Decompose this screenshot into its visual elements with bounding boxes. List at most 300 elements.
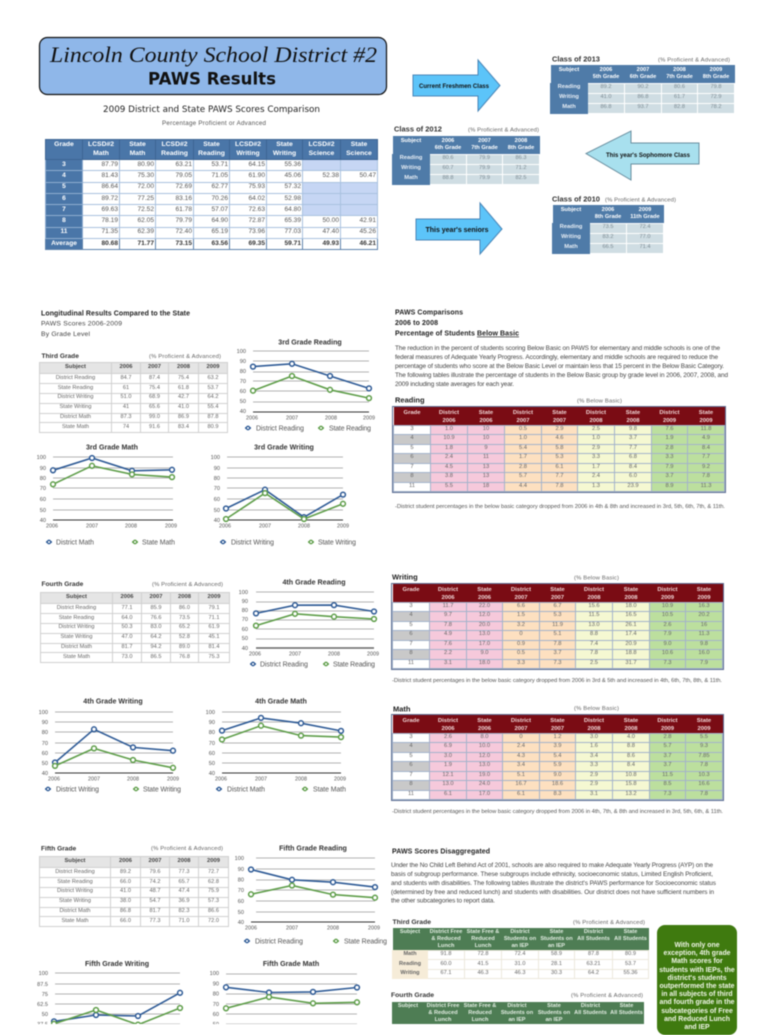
line chart: 3rd grade writing: 2007 (259, 524, 271, 530)
table: writing below basic: 16.3 (698, 603, 710, 609)
table: third grade scores: 83.4 (178, 424, 189, 430)
callout: subgroup performance summary: outperformed the state (659, 983, 735, 990)
table: math below basic: 8.0 (480, 734, 489, 740)
table: fourth grade scores (40, 592, 230, 664)
table: fifth grade scores: 2008 (178, 858, 190, 864)
table: writing below basic: 7.3 (663, 660, 672, 666)
heading: comparison title: 2009 District and State PAWS Scores Comparison (103, 104, 320, 114)
heading: fifth grade: (% Proficient & Advanced) (151, 846, 223, 852)
table: third grade scores: 2008 (177, 364, 190, 370)
callout: subgroup performance summary: exception, 4th grade (663, 950, 730, 957)
table: math below basic: 2009 (661, 726, 674, 732)
table: class of 2012 scores: 71.2 (516, 165, 526, 171)
table: fourth grade subgroup scores (391, 1002, 645, 1034)
panel: below basic introduction: percentage of students who score at the Below Basic Level or maintain less that 15 percent in the Below Basic Category. (395, 363, 724, 370)
table: math below basic: 10.8 (625, 772, 637, 778)
table: fourth grade scores: 71.1 (209, 615, 219, 621)
table: writing below basic: 17.4 (625, 631, 637, 637)
table: writing below basic: 2007 (551, 594, 564, 600)
line chart: 3rd grade reading (236, 338, 376, 433)
table: reading below basic: 8 (410, 473, 414, 479)
table: math below basic: 12.0 (479, 753, 490, 759)
table: third grade scores: 61.8 (178, 385, 189, 391)
line chart: 3rd grade writing: 2009 (337, 524, 349, 530)
table: fourth grade subgroup scores: State Free & (464, 1003, 496, 1009)
table: writing below basic: 10.9 (662, 603, 673, 609)
line chart: 3rd grade writing: 50 (214, 508, 220, 514)
table: math below basic: 2.6 (444, 734, 452, 740)
heading: class of 2010: Class of 2010 (552, 194, 600, 204)
table: fourth grade scores: 2009 (208, 594, 220, 600)
heading: class of 2012 (394, 124, 540, 134)
line chart: fifth grade reading (232, 843, 390, 946)
table: fourth grade scores: 52.8 (179, 634, 190, 640)
line chart: fifth grade reading: 40 (238, 920, 244, 926)
line chart: 4th grade writing: 40 (42, 771, 48, 777)
table: district and state scores: State (129, 141, 146, 148)
table: third grade subgroup scores: 30.3 (551, 970, 562, 976)
line chart: 4th grade math: 2009 (334, 776, 346, 782)
table: district and state scores: Writing (236, 150, 260, 156)
panel: below basic introduction: 2009 including state averages for each year. (395, 381, 514, 388)
table: writing below basic: 3.2 (517, 622, 525, 628)
table: reading below basic: 1.8 (445, 445, 453, 451)
table: fifth grade scores: 82.3 (179, 908, 189, 914)
table: fourth grade scores: 86.0 (179, 605, 190, 611)
table: math below basic: 8.6 (627, 753, 635, 759)
table: math below basic: 6 (409, 762, 413, 768)
table: fifth grade scores: 77.3 (179, 869, 189, 875)
table: class of 2013 scores: 86.8 (638, 94, 648, 100)
table: class of 2010 scores: 8th Grade (595, 214, 621, 220)
line chart: fifth grade reading: 50 (238, 910, 244, 916)
table: math below basic: 2007 (551, 726, 564, 732)
arrow: current freshmen class (412, 58, 502, 113)
table: class of 2012 scores: Writing (401, 165, 421, 171)
table: writing below basic: 11.7 (443, 603, 453, 609)
heading: fifth grade (39, 843, 228, 856)
table: class of 2010 scores: Subject (561, 206, 581, 212)
table: math below basic: 10.0 (479, 743, 490, 749)
table: third grade subgroup scores: 31.0 (515, 960, 525, 966)
table: class of 2012 scores: 60.7 (443, 165, 453, 171)
table: third grade subgroup scores: Writing (400, 970, 420, 976)
table: reading below basic: 7.6 (665, 426, 674, 432)
table: reading below basic: 13 (483, 473, 489, 479)
table: writing below basic: 3 (409, 603, 413, 609)
table: reading below basic: 8.4 (629, 464, 637, 470)
table: fifth grade scores: 57.3 (208, 898, 219, 904)
table: reading below basic: 2.5 (592, 426, 600, 432)
heading: math: Math (393, 704, 411, 714)
table: writing below basic: 5.1 (553, 631, 562, 637)
line chart: 4th grade reading: 2008 (328, 652, 340, 658)
table: third grade scores: District Math (60, 414, 91, 420)
table: reading below basic: 7 (410, 464, 414, 470)
line chart: 3rd grade reading: 80 (240, 369, 246, 375)
panel: disaggregated scores introduction: Under the No Child Left Behind Act of 2001, schools are also required to make Adequate Yearly Progress (AYP) on the (391, 862, 713, 869)
line chart: 4th grade math: 80 (209, 730, 215, 736)
line chart: 4th grade writing: 2009 (167, 776, 179, 782)
table: district and state scores: 72.63 (248, 206, 265, 213)
table: class of 2012 scores: 79.9 (479, 165, 490, 171)
table: writing below basic: 18.0 (625, 603, 637, 609)
line chart: 4th grade math: 100 (206, 710, 215, 716)
table: math below basic: 8.5 (663, 781, 672, 787)
table: math below basic: 10.3 (698, 772, 710, 778)
table: reading below basic: State (699, 410, 713, 416)
table: third grade subgroup scores: District (510, 929, 530, 935)
table: class of 2010 scores: 72.4 (640, 224, 650, 230)
table: math below basic: 3.7 (663, 753, 672, 759)
table: class of 2013 scores: 7th Grade (666, 74, 693, 80)
table: district and state scores: 87.79 (101, 161, 118, 168)
heading: fourth grade: (% Proficient & Advanced) (152, 582, 223, 588)
table: class of 2012 scores: Reading (400, 155, 422, 161)
table: fourth grade subgroup scores: Reduced (468, 1010, 492, 1016)
table: reading below basic: 2.4 (592, 473, 600, 479)
table: reading below basic: 2008 (626, 418, 640, 424)
line chart: 4th grade math: 60 (209, 751, 215, 757)
table: class of 2010 scores (551, 204, 665, 255)
table: writing below basic: 1.5 (517, 612, 525, 618)
table: third grade subgroup scores: Reading (399, 960, 421, 966)
heading: writing (391, 572, 620, 582)
table: reading below basic: 4.5 (445, 464, 453, 470)
line chart: 4th grade reading: 2009 (367, 652, 379, 658)
table: writing below basic: 20.2 (698, 612, 710, 618)
heading: class of 2013: Class of 2013 (552, 54, 600, 64)
table: third grade scores: 61 (123, 385, 129, 391)
table: class of 2013 scores: 72.9 (711, 94, 721, 100)
table: district and state scores: 69.35 (248, 240, 265, 247)
table: math below basic: 11 (408, 791, 414, 797)
table: class of 2013 scores: 80.6 (674, 84, 685, 90)
table: math below basic: 1.2 (553, 734, 562, 740)
table: fifth grade scores: 2006 (119, 858, 132, 864)
table: class of 2013 scores: Writing (559, 94, 579, 100)
table: reading below basic: 2006 (442, 418, 456, 424)
table: third grade scores: 80.9 (208, 424, 218, 430)
table: fourth grade scores: 73.0 (122, 654, 132, 660)
line chart: 4th grade reading: District Reading (260, 662, 308, 668)
table: district and state scores: 63.56 (211, 240, 228, 247)
table: third grade subgroup scores: 80.9 (625, 951, 636, 957)
table: writing below basic: 0 (519, 631, 523, 637)
table: class of 2013 scores: 78.2 (711, 104, 721, 110)
callout: subgroup performance summary: subcategories of Free (661, 1008, 733, 1015)
table: fourth grade scores: 76.6 (151, 615, 161, 621)
line chart: fifth grade writing: Fifth Grade Writing (85, 960, 149, 968)
table: class of 2013 scores: Subject (559, 66, 579, 72)
table: class of 2012 scores: Math (404, 175, 418, 181)
table: fifth grade scores: 48.7 (150, 888, 160, 894)
table: third grade scores: 87.8 (208, 414, 218, 420)
table: writing below basic: 2.6 (663, 622, 672, 628)
line chart: 4th grade reading: 50 (242, 636, 248, 642)
line chart: 3rd grade writing: 3rd Grade Writing (254, 444, 314, 452)
table: reading below basic: 1.7 (592, 464, 600, 470)
table: fourth grade scores: 89.0 (179, 644, 190, 650)
table: third grade subgroup scores: All Students (577, 936, 610, 942)
table: class of 2010 scores: Reading (560, 224, 582, 230)
table: district and state scores: 86.64 (101, 183, 118, 190)
table: math below basic: 5.9 (553, 762, 562, 768)
line chart: 4th grade reading: 80 (242, 608, 248, 614)
heading: fifth grade: Fifth Grade (41, 846, 77, 852)
line chart: fifth grade writing: 87.5 (37, 982, 48, 988)
line chart: 4th grade math: 2007 (255, 776, 267, 782)
table: writing below basic: 15.6 (588, 603, 600, 609)
table: writing below basic: 11.3 (699, 631, 709, 637)
table: fourth grade scores: District Math (61, 644, 92, 650)
table: district and state scores: Reading (161, 150, 188, 156)
table: district and state scores: 71.77 (137, 240, 154, 247)
table: fourth grade scores: 77.1 (122, 605, 132, 611)
table: fourth grade scores: 47.0 (122, 634, 132, 640)
heading: class of 2012: (% Proficient & Advanced) (468, 128, 539, 134)
table: math below basic: 9.0 (553, 772, 562, 778)
table: math below basic: 5.7 (663, 743, 672, 749)
table: math below basic: 7.3 (663, 791, 672, 797)
table: class of 2013 scores: 93.7 (638, 104, 648, 110)
heading: reading (394, 396, 622, 405)
table: fourth grade subgroup scores: an IEP (508, 1017, 526, 1023)
table: writing below basic: District (584, 586, 604, 592)
line chart: 3rd grade math: 2006 (46, 524, 58, 530)
table: third grade scores: 87.4 (149, 375, 160, 381)
line chart: 3rd grade writing: 60 (214, 497, 220, 503)
table: class of 2013 scores: 82.8 (674, 104, 685, 110)
table: third grade subgroup scores: 72.4 (515, 951, 525, 957)
table: third grade scores: 64.2 (208, 394, 218, 400)
line chart: fifth grade reading: 2008 (327, 926, 339, 932)
table: writing below basic: 3.7 (553, 650, 562, 656)
table: fifth grade scores: 86.6 (208, 908, 219, 914)
callout: subgroup performance summary: students with IEPs, the (659, 967, 735, 974)
table: fourth grade scores: State Reading (59, 615, 94, 621)
table: reading below basic: 8.4 (702, 445, 710, 451)
table: class of 2013 scores: 6th Grade (630, 74, 656, 80)
line chart: fifth grade math: 60 (213, 1012, 219, 1018)
table: class of 2012 scores: 2007 (478, 138, 491, 144)
table: writing below basic: 7.9 (700, 660, 708, 666)
table: writing below basic: 2.2 (444, 650, 452, 656)
arrow: this year's seniors (414, 201, 504, 256)
table: math below basic: 12.1 (442, 772, 454, 778)
table: writing below basic: 5.3 (553, 612, 562, 618)
table: third grade scores: 74 (123, 424, 129, 430)
table: district and state scores: 62.39 (137, 228, 154, 235)
line chart: fifth grade reading: State Reading (344, 938, 387, 946)
heading: reading: (% Below Basic) (577, 398, 622, 404)
table: reading below basic: 3 (410, 426, 414, 432)
table: third grade scores: State Writing (60, 404, 91, 410)
table: math below basic: 11.5 (662, 772, 673, 778)
table: writing below basic: 13.0 (479, 631, 490, 637)
table: district and state scores: 3 (62, 161, 66, 168)
line chart: 3rd grade math (36, 443, 178, 546)
callout: subgroup performance summary (657, 925, 737, 1035)
table: third grade scores: 41 (123, 404, 129, 410)
table: district and state scores: LCSD#2 (161, 141, 188, 148)
table: class of 2013 scores: 2006 (600, 66, 612, 72)
table: fifth grade scores: State Writing (59, 898, 91, 904)
table: fourth grade subgroup scores: Students on (538, 1010, 570, 1016)
panel: reading below basic (391, 396, 727, 510)
table: district and state scores: 5 (62, 183, 66, 190)
heading: fourth grade: Fourth Grade (42, 581, 84, 588)
line chart: fifth grade math: 80 (213, 992, 219, 998)
line chart: 3rd grade math: 50 (40, 508, 46, 514)
table: writing below basic: 7.3 (553, 660, 562, 666)
table: class of 2012 scores: 80.6 (443, 155, 453, 161)
line chart: 3rd grade reading: State Reading (329, 426, 371, 432)
table: third grade subgroup scores: All Students (614, 936, 647, 942)
table: fifth grade scores: District Writing (57, 888, 93, 894)
table: district and state scores: 50.00 (322, 217, 339, 224)
line chart: 4th grade reading: 40 (242, 646, 248, 652)
table: class of 2010 scores: 83.2 (603, 234, 613, 240)
line chart: 3rd grade writing (210, 443, 356, 547)
table: writing below basic: 6.7 (553, 603, 562, 609)
table: writing below basic: 6 (409, 631, 413, 637)
table: writing below basic: 7.4 (590, 641, 598, 647)
heading: longitudinal results: Longitudinal Results Compared to the State (41, 310, 190, 318)
table: writing below basic: 18.8 (625, 650, 637, 656)
table: district and state scores: 80.90 (137, 161, 154, 168)
table: math below basic: 2009 (697, 726, 711, 732)
table: third grade subgroup scores: State (624, 929, 637, 935)
table: district and state scores: 72.52 (137, 206, 154, 213)
table: fourth grade subgroup scores: Subject (398, 1003, 418, 1009)
table: reading below basic: 5.7 (519, 473, 527, 479)
heading: fourth grade (41, 580, 224, 588)
table: math below basic: District (584, 718, 604, 724)
table: reading below basic: 2007 (516, 418, 530, 424)
heading: longitudinal results: PAWS Scores 2006-2009 (41, 320, 122, 328)
table: third grade scores: 86.9 (178, 414, 189, 420)
table: math below basic: 17.0 (479, 791, 490, 797)
table: math below basic: 6.1 (444, 791, 452, 797)
table: third grade subgroup scores: 58.9 (551, 951, 562, 957)
table: writing below basic: 18.0 (479, 660, 490, 666)
table: writing below basic: State (550, 586, 565, 592)
table: writing below basic: District (438, 586, 458, 592)
table: fourth grade scores: 64.0 (122, 615, 132, 621)
table: fourth grade subgroup scores: All Students (610, 1010, 643, 1016)
table: writing below basic: 0.5 (517, 650, 525, 656)
table: math below basic: 7 (409, 772, 413, 778)
table: fourth grade scores: 83.0 (151, 624, 161, 630)
table: writing below basic: 9.8 (700, 641, 708, 647)
table: reading below basic: 7.9 (665, 464, 674, 470)
table: district and state scores: 73.96 (248, 228, 265, 235)
table: math below basic: 16.7 (515, 781, 527, 787)
table: class of 2010 scores: 11th Grade (630, 214, 660, 220)
panel: disaggregated scores introduction: basis of subgroup performance. These subgroups include ethnicity, socioeconomic status, Limited English Proficient, (391, 871, 713, 878)
table: third grade subgroup scores: 72.8 (478, 951, 488, 957)
table: fourth grade scores: 79.1 (209, 605, 219, 611)
panel: math below basic (390, 704, 725, 815)
table: reading below basic: 6.1 (555, 464, 564, 470)
line chart: 3rd grade reading: 100 (237, 349, 246, 355)
panel: disaggregated scores introduction: (determined by free and reduced lunch) and students with disabilities. Our district does not have sufficient numbers in (391, 889, 714, 896)
table: reading below basic: 11.3 (701, 483, 711, 489)
table: math below basic: 5.5 (700, 734, 708, 740)
table: writing below basic: 4 (409, 612, 413, 618)
table: class of 2013 scores: 86.8 (601, 104, 611, 110)
table: fourth grade scores: 86.5 (151, 654, 161, 660)
note: writing summary: -District student percentages in the below basic category dropped from 2006 in 3rd & 5th and increased in 4th, 6th, 7th, 8th, & 11th. (392, 678, 722, 684)
table: class of 2013 scores: 2009 (710, 66, 722, 72)
table: writing below basic: 3.1 (444, 660, 452, 666)
table: reading below basic: 11.8 (701, 426, 711, 432)
table: reading below basic: 3.8 (445, 473, 453, 479)
table: class of 2013 scores: 89.2 (601, 84, 611, 90)
table: class of 2013 scores: 2007 (637, 66, 649, 72)
line chart: 3rd grade writing: 100 (211, 455, 220, 461)
table: writing below basic: 10.5 (662, 612, 673, 618)
table: district and state scores: 78.19 (101, 217, 118, 224)
line chart: 3rd grade math: 2008 (125, 524, 137, 530)
table: math below basic: 6.1 (517, 791, 525, 797)
table: fourth grade scores: 81.4 (209, 644, 219, 650)
heading: reading: Reading (395, 396, 425, 404)
table: district and state scores: LCSD#2 (308, 141, 335, 148)
table: math below basic: 3 (409, 734, 413, 740)
table: reading below basic: 1.0 (519, 435, 527, 441)
line chart: fifth grade writing (34, 958, 190, 1024)
table: writing below basic: District (511, 586, 531, 592)
title banner (38, 36, 388, 96)
table: writing below basic: 4.9 (444, 631, 452, 637)
line chart: 3rd grade reading: 2007 (286, 416, 298, 422)
table: district and state scores: 52.38 (322, 172, 339, 179)
table: third grade subgroup scores: 67.1 (441, 970, 451, 976)
table: district and state scores: 42.91 (359, 217, 376, 224)
line chart: fifth grade math: Fifth Grade Math (263, 960, 319, 968)
table: reading below basic: 10 (483, 426, 489, 432)
table: reading below basic: 2.9 (592, 445, 600, 451)
table: third grade subgroup scores: Lunch (438, 943, 454, 949)
table: reading below basic: 3.7 (629, 435, 637, 441)
line chart: 3rd grade reading: 60 (240, 389, 246, 395)
heading: fourth grade disaggregated: Fourth Grade (391, 992, 434, 999)
table: third grade subgroup scores: an IEP (548, 943, 565, 949)
table: fifth grade scores: 47.4 (179, 888, 189, 894)
table: math below basic: 19.0 (479, 772, 490, 778)
table: writing below basic: 2008 (587, 594, 601, 600)
table: district and state scores: 71.05 (211, 172, 228, 179)
table: reading below basic: 5.4 (519, 445, 527, 451)
table: writing below basic: Grade (402, 586, 420, 592)
line chart: 3rd grade reading: 40 (240, 409, 246, 415)
table: reading below basic: State (626, 410, 640, 416)
table: third grade subgroup scores: an IEP (511, 943, 529, 949)
table: fourth grade subgroup scores: an IEP (545, 1017, 563, 1023)
table: class of 2013 scores: Math (562, 104, 576, 110)
table: district and state scores: 45.26 (359, 228, 376, 235)
table: writing below basic: 7.6 (444, 641, 452, 647)
table: district and state scores: 6 (62, 195, 66, 202)
table: reading below basic: 18 (483, 483, 489, 489)
note: math summary: -District student percentages in the below basic category dropped from 2006 in 4th, 7th, & 8th and increased in 3rd, 5th, 6th, & 11th. (392, 809, 723, 815)
table: district and state scores: LCSD#2 (235, 141, 261, 148)
table: writing below basic: 16 (701, 622, 707, 628)
table: math below basic: 8.4 (627, 762, 635, 768)
panel: writing below basic (390, 572, 725, 684)
